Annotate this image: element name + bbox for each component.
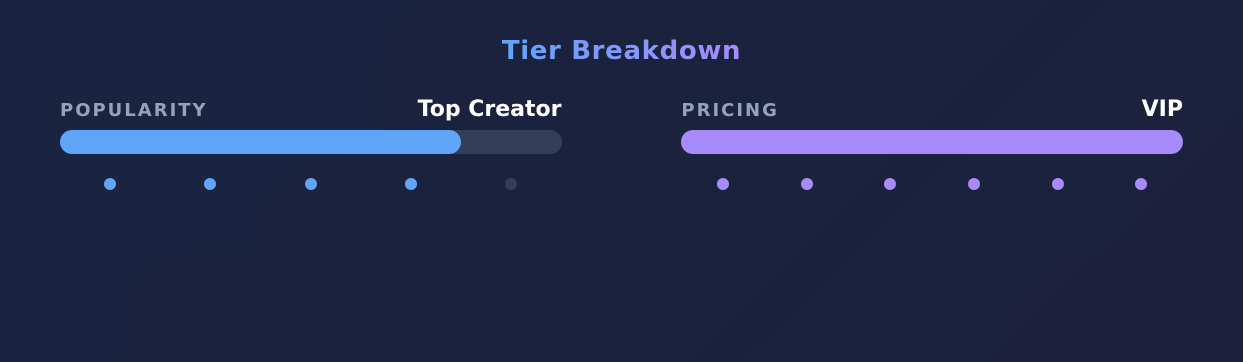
popularity dots <box>104 178 517 190</box>
dot 6 <box>1135 178 1147 190</box>
dot 3 <box>884 178 896 190</box>
pricing bar fill <box>681 130 1183 154</box>
dot 4 <box>405 178 417 190</box>
panel: pricing <box>681 97 1183 190</box>
dot 4 <box>968 178 980 190</box>
dot 2 <box>801 178 813 190</box>
dot 2 <box>204 178 216 190</box>
panel: popularity <box>60 97 562 190</box>
title: Tier Breakdown <box>502 36 741 66</box>
popularity label: POPULARITY <box>60 100 208 121</box>
pricing dots <box>717 178 1147 190</box>
pricing value: VIP <box>1142 97 1183 122</box>
dot 1 <box>104 178 116 190</box>
popularity value: Top Creator <box>418 97 562 122</box>
pricing label: PRICING <box>681 100 779 121</box>
popularity bar <box>60 130 562 154</box>
dot 5 <box>1052 178 1064 190</box>
popularity bar fill <box>60 130 461 154</box>
dot 3 <box>305 178 317 190</box>
dot 5 <box>505 178 517 190</box>
pricing bar <box>681 130 1183 154</box>
dot 1 <box>717 178 729 190</box>
